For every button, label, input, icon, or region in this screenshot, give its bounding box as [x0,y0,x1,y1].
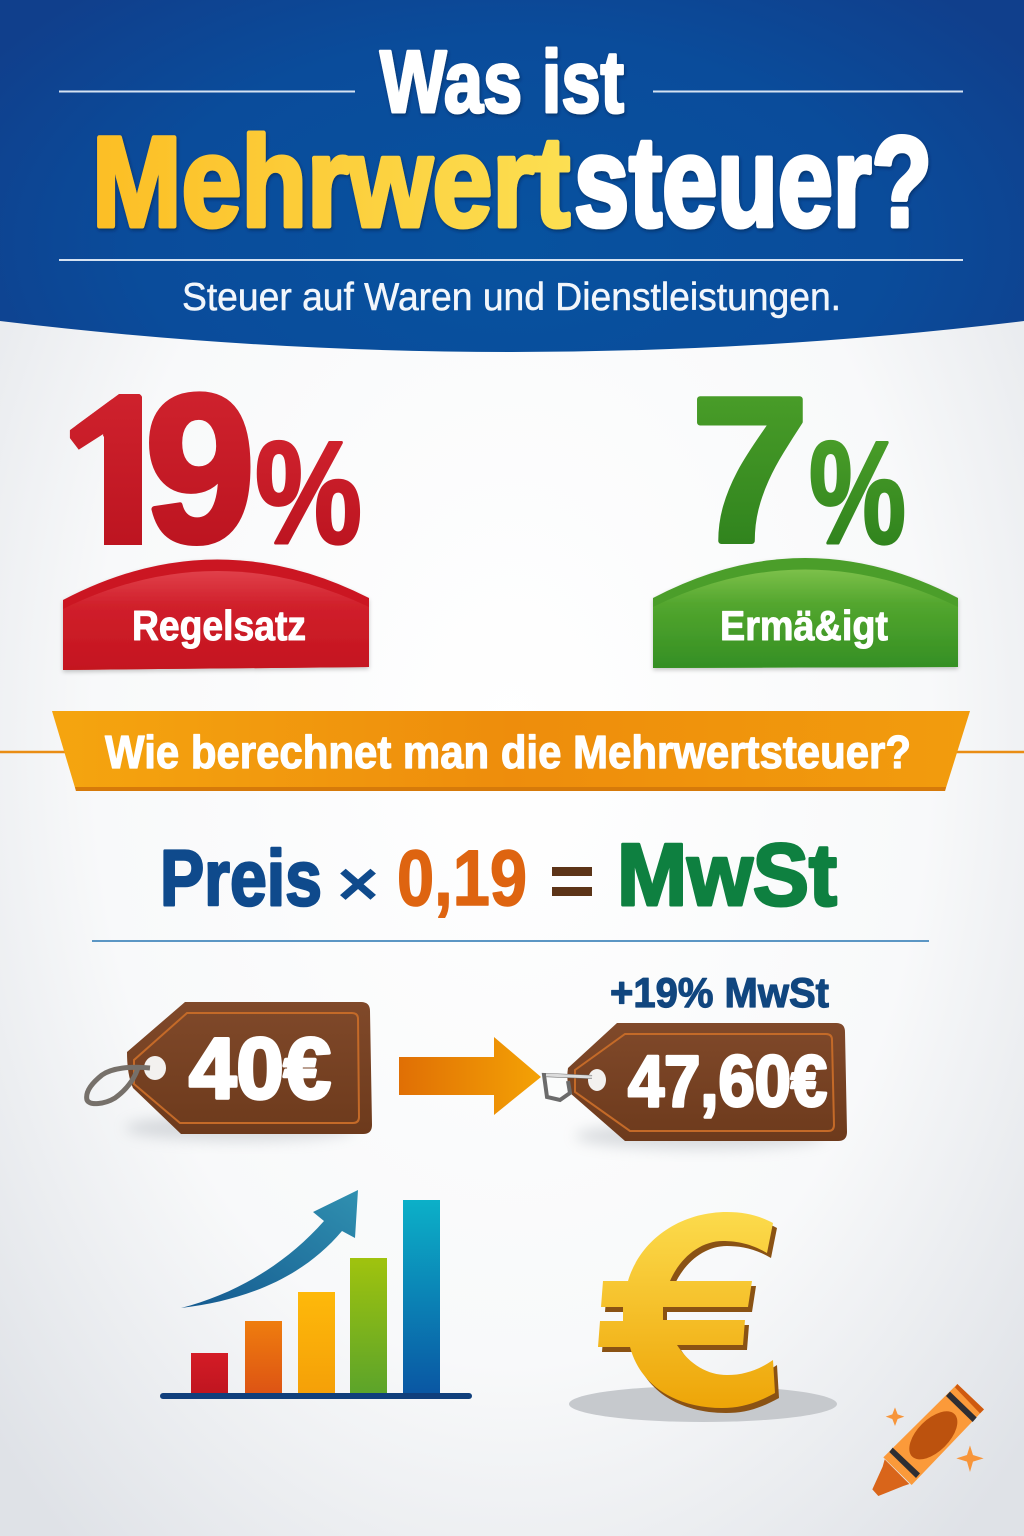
formula: Preis [160,833,322,922]
price tag: 47,60€: 47,60€ [628,1042,827,1122]
badge: Ermä&igt [653,558,958,668]
number: 7% [691,355,906,585]
panel: standard rate 19% [61,391,371,674]
icon: euro symbol [569,1212,837,1422]
panel: reduced rate 7% [653,355,958,668]
number: 19% [70,391,360,546]
number: 19%: % [255,411,362,574]
price tag: 40€: 40€ [189,1021,331,1117]
formula [160,825,837,924]
formula: 0,19 [397,833,527,922]
number: 19%: 9 [145,351,255,586]
bar chart [160,1190,472,1399]
formula: MwSt [617,825,837,924]
price tag: 47,60€ [544,1023,847,1149]
badge: Regelsatz [63,559,369,670]
equals sign [552,867,592,896]
title line: Mehrwertsteuer: steuer? [574,111,932,254]
formula: × [337,850,379,919]
price tag: 40€ [87,1002,372,1141]
number: 7%: % [809,411,906,574]
badge: Regelsatz: Regelsatz [132,602,306,649]
title line: Was ist: Was ist [380,32,624,131]
icon: growth arrow [181,1190,358,1308]
badge: Ermä&igt: Ermä&igt [720,602,888,649]
section ribbon [0,711,1024,791]
title line: Mehrwertsteuer [92,111,932,254]
icon: crayon logo [872,1384,984,1496]
number: 7%: 7 [691,355,809,585]
icon: tag wire [544,1075,592,1100]
number: 19%: 1 [62,355,174,585]
header banner [0,0,1024,352]
label: +19% MwSt: +19% MwSt [610,969,829,1016]
icon: tag string [87,1067,150,1104]
title line: Mehrwertsteuer: Mehrwert [92,111,570,254]
section ribbon: Wie berechnet man die Mehrwertsteuer? [105,726,911,778]
subtitle: Steuer auf Waren und Dienstleistungen. [182,276,841,319]
arrow [399,1037,541,1115]
